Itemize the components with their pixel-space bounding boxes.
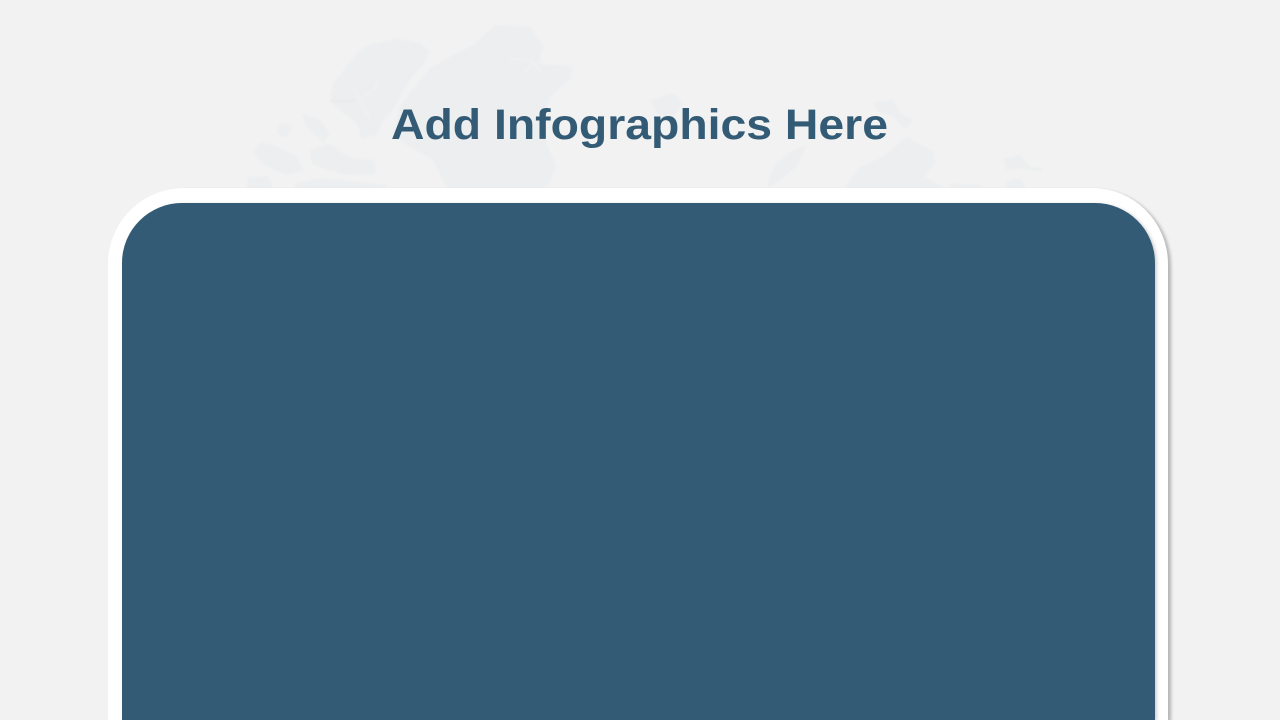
panel: blue content area bbox=[122, 203, 1155, 720]
background map silhouette bbox=[332, 100, 354, 102]
panel: white card frame bbox=[108, 188, 1168, 720]
title: Add Infographics Here bbox=[391, 101, 888, 149]
